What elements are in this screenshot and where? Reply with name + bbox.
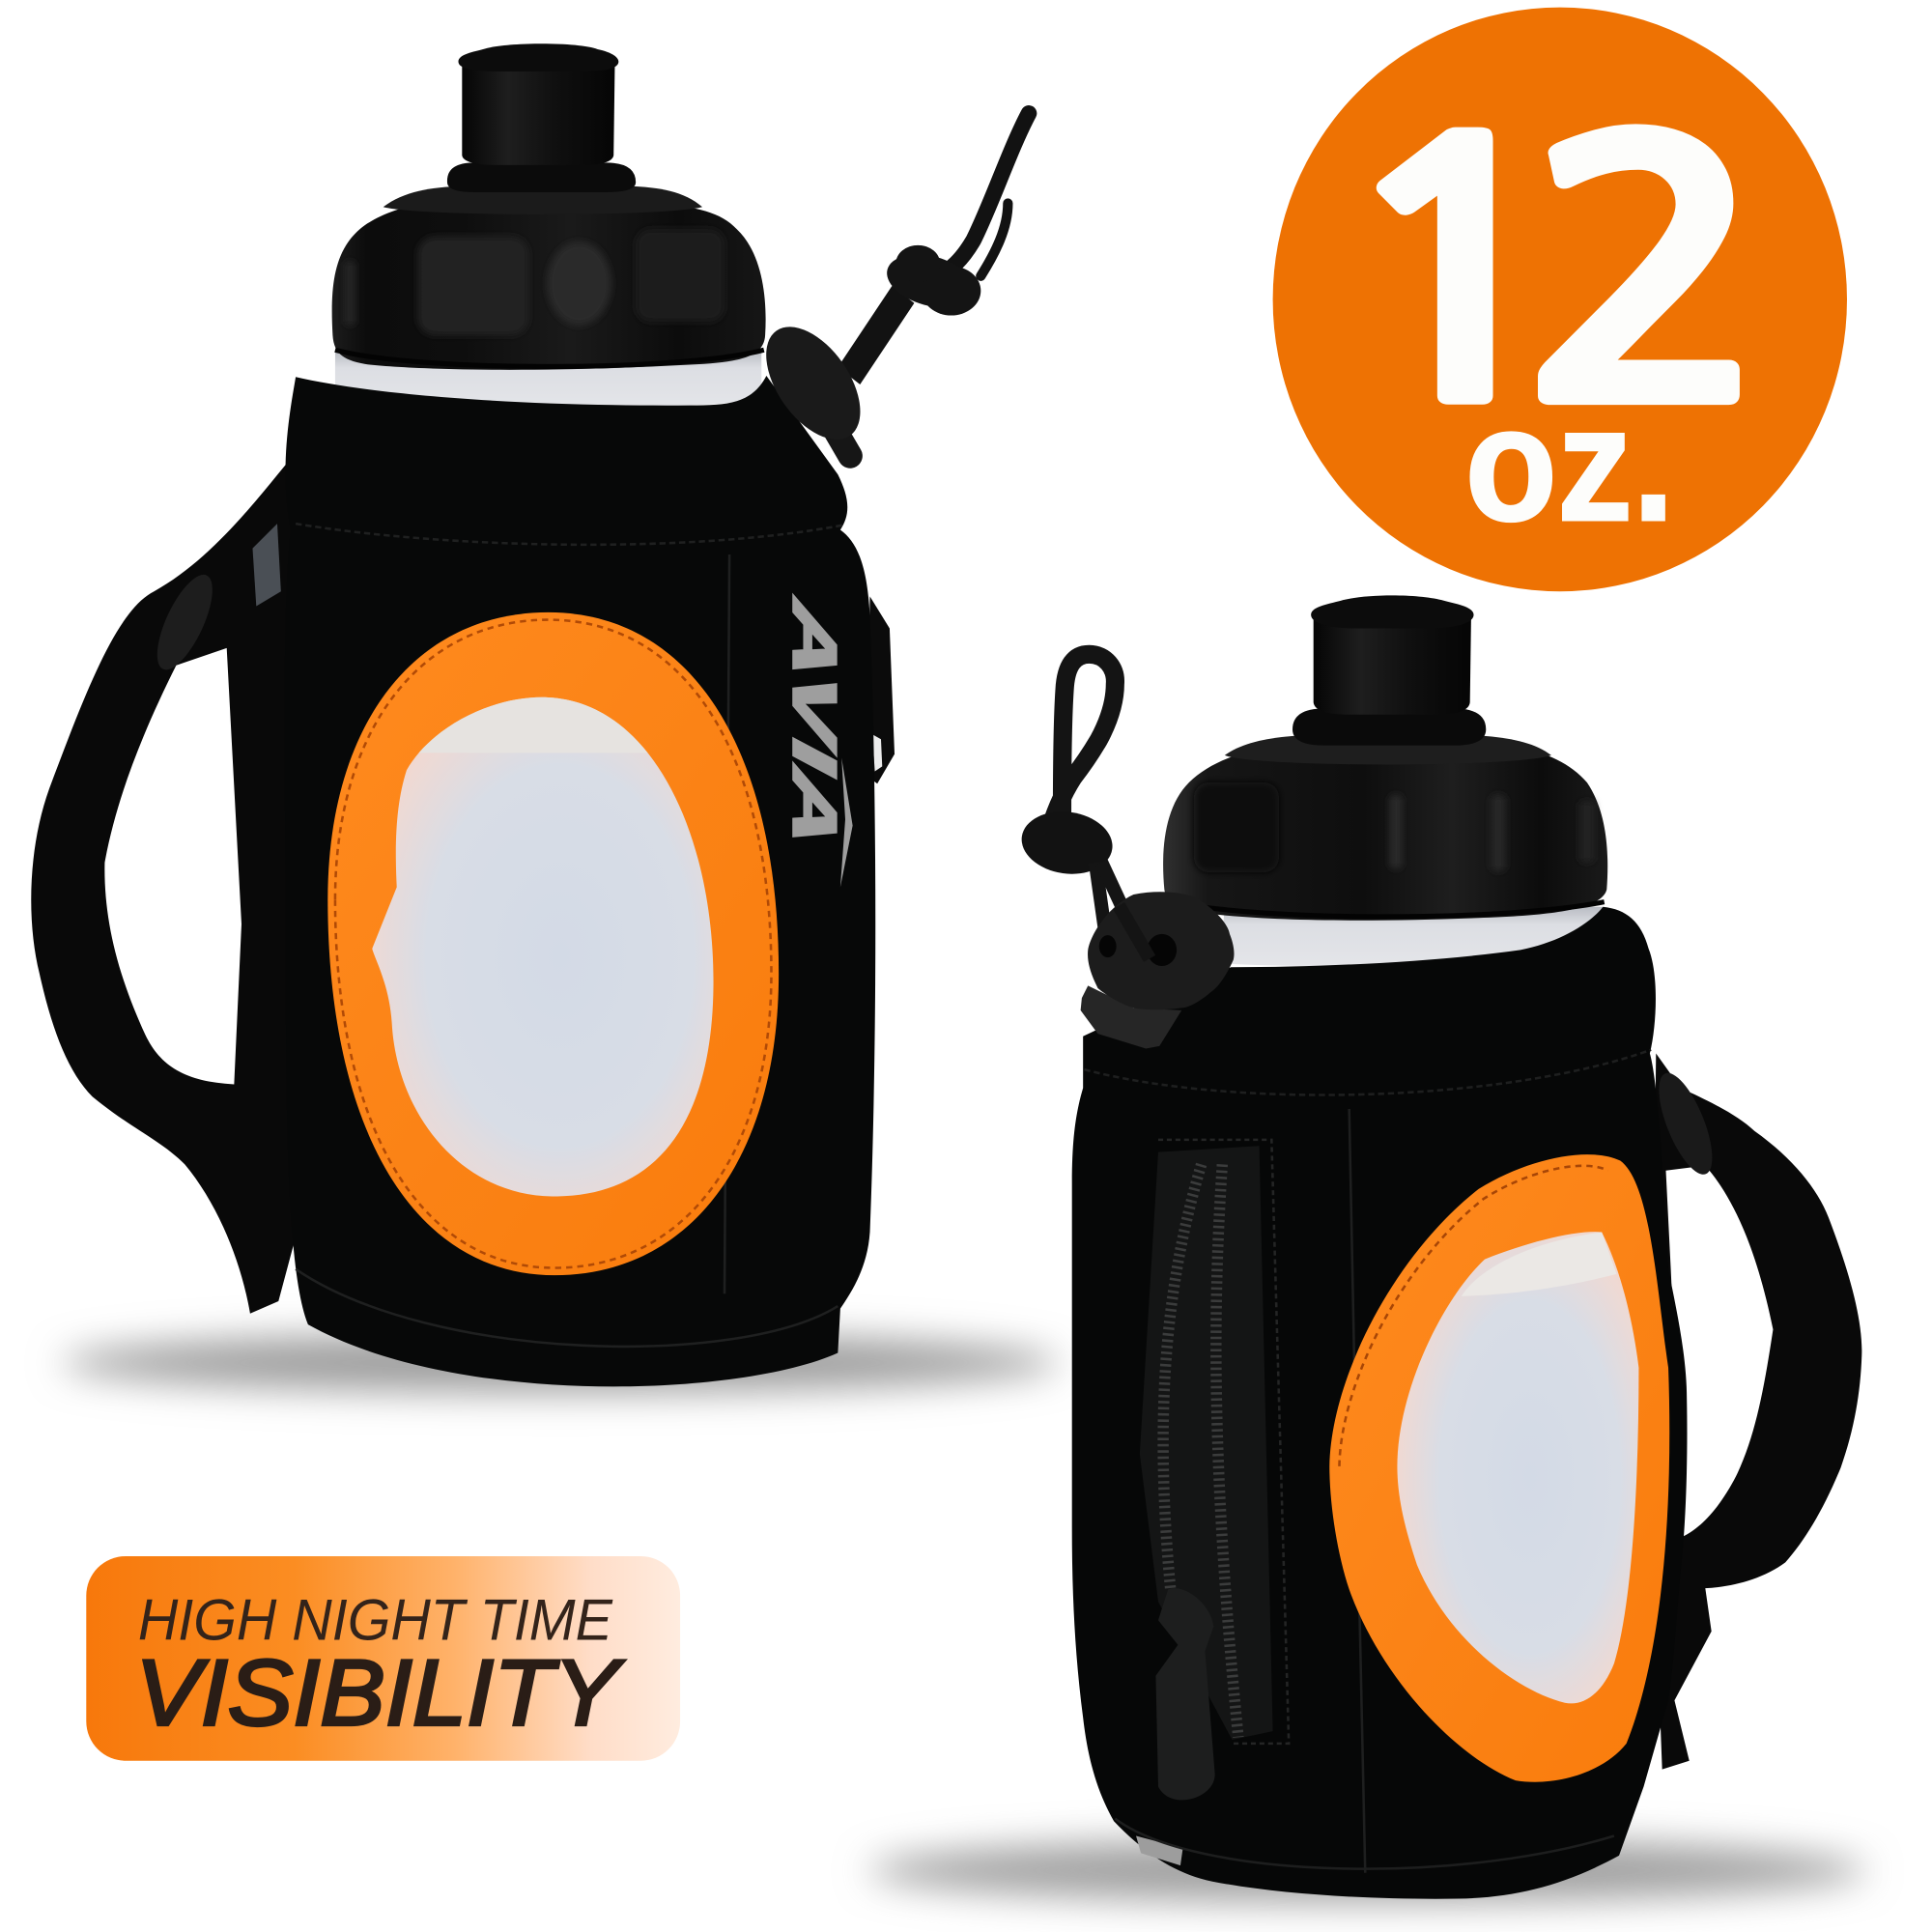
clip opening xyxy=(872,734,882,771)
lid top step xyxy=(384,186,702,214)
lid xyxy=(1163,748,1607,921)
callout line 1: HIGH NIGHT TIME xyxy=(138,1588,613,1653)
number 12: 1 xyxy=(1327,102,1584,452)
callout line 2: VISIBILITY xyxy=(135,1640,625,1746)
callout pill xyxy=(86,1556,680,1761)
window xyxy=(363,690,721,1202)
badge: 12 oz xyxy=(1273,8,1847,591)
sleeve xyxy=(285,376,875,1386)
bead with tab xyxy=(1081,892,1234,1048)
lid base edge xyxy=(335,350,764,366)
reflective strip xyxy=(1136,1836,1182,1865)
handle strap: left bottle xyxy=(31,458,301,1314)
logo: AVIA xyxy=(780,586,853,887)
lid base edge xyxy=(1171,902,1605,917)
shadow: right bottle xyxy=(868,1838,1866,1902)
neck ring xyxy=(1293,708,1486,746)
knot xyxy=(881,245,980,316)
cord xyxy=(936,113,1029,278)
lid top step xyxy=(1225,734,1551,764)
sleeve stitches xyxy=(1084,1050,1651,1873)
lid grip recesses xyxy=(1194,782,1595,872)
zipper pull xyxy=(1155,1588,1215,1800)
strap slider xyxy=(1648,1066,1723,1180)
nozzle xyxy=(462,64,614,165)
number 12: 2 xyxy=(1520,101,1772,452)
ring stitching xyxy=(335,620,771,1267)
ring stitching xyxy=(1339,1166,1608,1466)
logo: AVIA: AVIA xyxy=(780,586,849,867)
orange ring xyxy=(327,612,779,1275)
lid xyxy=(332,203,766,370)
lid grip recesses xyxy=(345,229,724,335)
nozzle lip xyxy=(458,43,618,71)
cord strands xyxy=(1095,863,1150,966)
strap tag xyxy=(252,524,281,607)
sleeve stitches xyxy=(296,524,844,1347)
cord lower strand xyxy=(838,286,914,384)
bottom trim xyxy=(1115,1819,1614,1869)
window xyxy=(1397,1232,1638,1703)
shadow: left bottle xyxy=(62,1333,1060,1392)
callout: high night time visibility xyxy=(86,1556,680,1761)
unit oz.: oz. xyxy=(1465,373,1674,554)
cord loop xyxy=(1047,654,1115,838)
right bottle xyxy=(1017,595,1861,1899)
nozzle lip xyxy=(1311,595,1474,629)
orange ring xyxy=(1329,1154,1669,1782)
badge circle xyxy=(1273,8,1847,591)
number 12 xyxy=(1327,101,1772,452)
neck ring xyxy=(447,162,636,192)
handle strap: right bottle xyxy=(1651,1054,1861,1770)
left bottle xyxy=(31,43,1029,1386)
window ribbed band xyxy=(1462,1233,1616,1296)
bottle band xyxy=(1220,907,1603,966)
window ribbed band xyxy=(419,697,647,753)
bottle band xyxy=(335,352,761,408)
knot xyxy=(1017,806,1117,880)
strap slider xyxy=(146,567,223,677)
nozzle xyxy=(1314,613,1471,715)
sleeve xyxy=(1072,907,1687,1899)
bead xyxy=(747,310,879,456)
zip pocket xyxy=(1140,1140,1289,1800)
zipper teeth xyxy=(1163,1164,1202,1589)
white sliver xyxy=(287,918,304,1213)
clip on sleeve side xyxy=(867,596,895,783)
